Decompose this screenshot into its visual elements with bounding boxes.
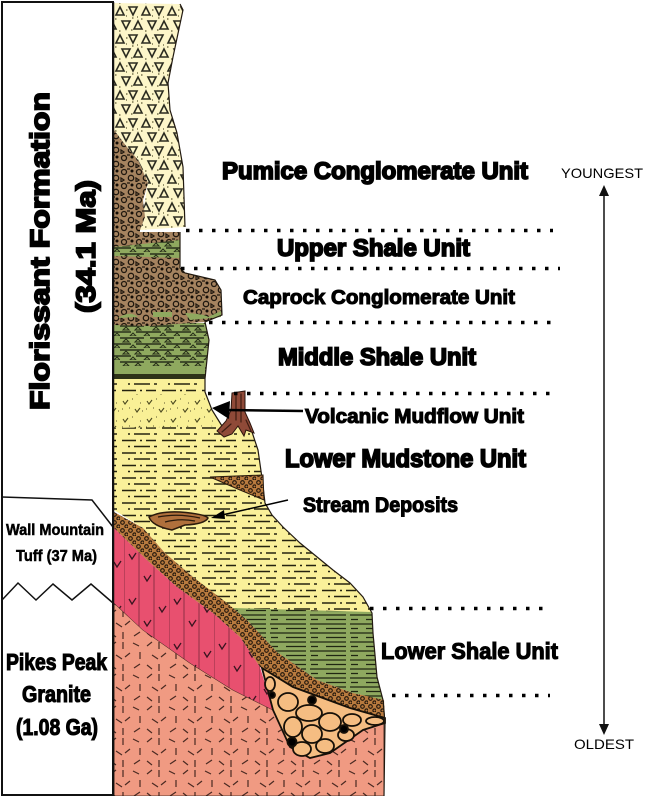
Pikes Peak Granite label	[6, 649, 107, 740]
Pikes Peak Granite label: (1.08 Ga)	[16, 714, 98, 740]
unit label: Stream Deposits: Stream Deposits	[303, 494, 458, 517]
Wall Mountain Tuff label: Tuff (37 Ma)	[16, 548, 97, 565]
layer: caprock conglomerate	[114, 262, 222, 326]
label: oldest: OLDEST	[574, 736, 634, 752]
layer: brown wedge	[114, 130, 148, 234]
arrow: volcanic mudflow	[212, 401, 303, 419]
arrow: stream deposits	[211, 500, 288, 519]
green band	[114, 240, 180, 258]
unit label: Lower Mudstone: Lower Mudstone Unit	[285, 445, 527, 473]
unit label: Lower Shale: Lower Shale Unit	[381, 638, 558, 664]
layer: yellow band	[114, 379, 205, 394]
label: youngest: YOUNGEST	[561, 165, 643, 181]
unit label: Upper Shale: Upper Shale Unit	[277, 235, 470, 262]
unit label: Middle Shale: Middle Shale Unit	[278, 344, 476, 371]
dotted unit boundaries	[181, 230, 560, 696]
layer: orange band	[114, 512, 385, 718]
Florissant Formation label: Florissant Formation	[25, 92, 55, 410]
Wall Mountain Tuff label	[6, 522, 104, 565]
layer: granite	[114, 603, 384, 796]
Florissant Formation label	[25, 92, 101, 410]
layer: volcanic mudflow	[114, 392, 222, 428]
stream deposit lens	[149, 512, 208, 530]
green lenses	[118, 311, 221, 320]
age arrow	[599, 185, 609, 735]
stream deposit upper	[210, 475, 264, 500]
Pikes Peak Granite label: Granite	[22, 681, 91, 707]
column right outline	[168, 4, 385, 796]
Florissant Formation label: (34.1 Ma)	[71, 180, 101, 313]
column left edge	[112, 2, 114, 796]
layer: cobbles	[262, 668, 385, 758]
layer: red tuff	[114, 528, 273, 710]
layer: middle shale	[114, 323, 209, 379]
unit label: Volcanic Mudflow: Volcanic Mudflow Unit	[305, 406, 524, 428]
tree stump	[217, 391, 254, 437]
layer: pumice conglomerate	[114, 3, 185, 230]
layer: upper shale	[114, 232, 180, 268]
Wall Mountain Tuff label: Wall Mountain	[6, 522, 104, 539]
layer: dark band	[114, 366, 205, 379]
layer: lower shale	[233, 608, 383, 700]
unit label: Caprock Conglomerate: Caprock Conglomerate Unit	[243, 287, 515, 309]
unit label: Pumice Conglomerate: Pumice Conglomerate Unit	[222, 158, 528, 185]
Pikes Peak Granite label: Pikes Peak	[6, 649, 107, 675]
left label column	[2, 2, 113, 795]
layer: lower mudstone	[114, 426, 372, 613]
